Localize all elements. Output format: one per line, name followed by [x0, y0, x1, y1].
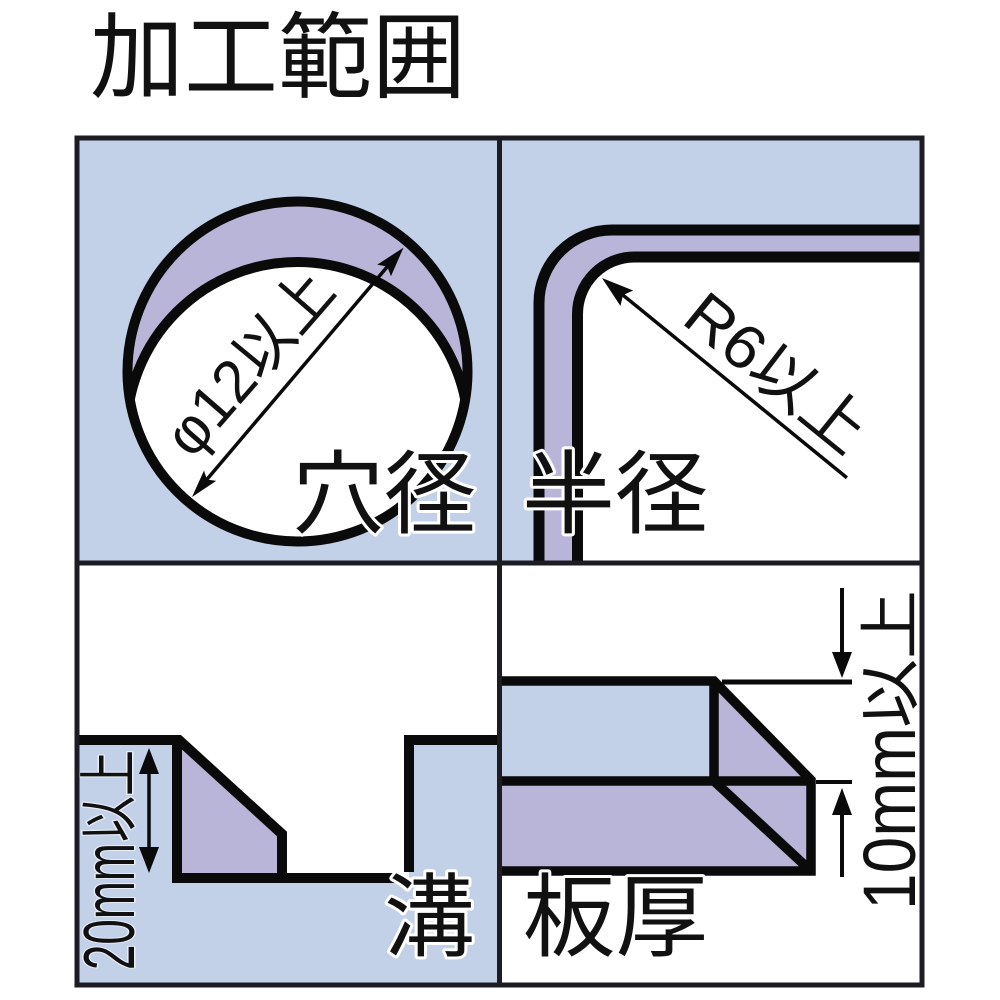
right raised block [409, 740, 499, 885]
panel: radius [499, 138, 922, 563]
outer frame and dividers [77, 138, 922, 985]
purple band [539, 230, 922, 563]
depth label: 以上 [76, 750, 143, 842]
radius label: R6以上 [671, 279, 881, 468]
plate outline [500, 681, 811, 871]
left raised block [77, 740, 177, 880]
band outer edge [539, 230, 922, 563]
panel: hole diameter [80, 140, 497, 560]
side chamfer [714, 682, 811, 871]
thin extension lines [722, 680, 852, 684]
lower extension line [816, 780, 852, 784]
panel: plate thickness [499, 563, 931, 985]
diameter arrow [185, 242, 410, 503]
thickness label: 以上 [857, 590, 926, 728]
depth arrow [139, 748, 159, 873]
front face [500, 781, 808, 871]
circle hole with crescent [122, 196, 472, 546]
right wall outline [409, 740, 499, 872]
top face [500, 682, 713, 780]
diameter label: φ12以上 [151, 257, 347, 469]
ground [77, 878, 499, 985]
label: hole diameter: 穴径 [292, 421, 476, 553]
inner white corner [577, 257, 922, 563]
label: groove: 溝 [384, 844, 475, 976]
thickness label: 10mm [848, 727, 931, 910]
label: radius: 半径 [522, 421, 708, 553]
thickness label [848, 590, 931, 910]
groove outline [77, 740, 400, 878]
band inner edge [578, 257, 922, 563]
thickness arrow upper [832, 588, 852, 678]
depth label: 20mm [70, 843, 150, 970]
panel: groove [70, 563, 499, 985]
chamfer [177, 740, 282, 878]
thickness arrow lower [832, 788, 852, 877]
radius arrow [596, 270, 853, 485]
label: plate thickness: 板厚 [523, 844, 708, 976]
